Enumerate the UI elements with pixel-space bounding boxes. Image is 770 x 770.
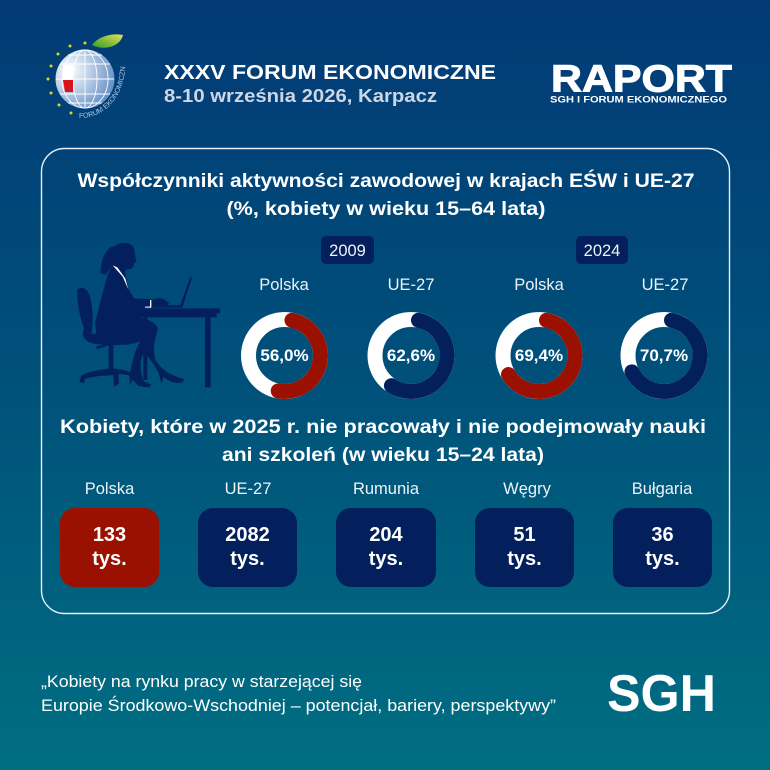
card: Polska 133 tys. xyxy=(60,508,159,587)
label: Rumunia: Rumunia xyxy=(353,480,420,498)
donut: Polska 2009: 56,0% xyxy=(260,346,309,365)
donut: UE-27 2024 xyxy=(621,313,707,398)
label: 2009 xyxy=(321,236,374,264)
heading: NEET women: Kobiety, które w 2025 r. nie pracowały i nie podejmowały nauki xyxy=(60,416,706,438)
icon: stars xyxy=(46,42,86,114)
label: UE-27: UE-27 xyxy=(225,480,271,498)
header: event date: 8-10 września 2026, Karpacz xyxy=(164,86,437,106)
donut: UE-27 2024: 70,7% xyxy=(640,346,688,365)
label: UE-27 2024: UE-27 xyxy=(642,276,688,294)
woman body xyxy=(95,243,185,387)
footer: report title xyxy=(41,673,556,715)
label: Polska: Polska xyxy=(85,480,135,498)
card: Polska 133 tys.: 133 xyxy=(93,524,126,546)
desk xyxy=(138,308,220,387)
blouse and cuff xyxy=(113,265,128,289)
laptop xyxy=(150,277,192,308)
header: event title: XXXV FORUM EKONOMICZNE xyxy=(164,62,496,84)
card: Bułgaria 36 tys.: 36 xyxy=(651,524,674,546)
label: Polska 2024: Polska xyxy=(514,276,565,294)
icon: leaf xyxy=(92,34,123,48)
heading: NEET women xyxy=(60,416,706,466)
card: UE-27 2082 tys.: tys. xyxy=(230,548,265,570)
card: UE-27 2082 tys. xyxy=(198,508,297,587)
donut: UE-27 2009 xyxy=(368,313,454,398)
icon: globe xyxy=(56,50,114,108)
heading: NEET women: ani szkoleń (w wieku 15–24 lata) xyxy=(222,444,544,466)
logo: SGH: SGH xyxy=(607,665,716,723)
card: UE-27 2082 tys.: 2082 xyxy=(225,524,270,546)
label: 2024: 2024 xyxy=(584,242,620,260)
panel: main content xyxy=(42,148,730,614)
label: 2024 xyxy=(576,236,628,264)
card: Bułgaria 36 tys.: tys. xyxy=(645,548,680,570)
logo: Forum Ekonomiczne xyxy=(46,34,126,118)
card: Rumunia 204 tys.: tys. xyxy=(369,548,403,570)
footer: report title: Europie Środkowo-Wschodniej – potencjał, bariery, perspektywy” xyxy=(41,696,556,715)
header: report subtitle: SGH I FORUM EKONOMICZNEGO xyxy=(550,94,727,106)
donut: UE-27 2009: 62,6% xyxy=(387,346,435,365)
heading: activity rates: Współczynniki aktywności zawodowej w krajach EŚW i UE-27 xyxy=(78,168,694,192)
label: Polska 2009: Polska xyxy=(259,276,310,294)
label: Bułgaria: Bułgaria xyxy=(632,480,693,498)
card: Rumunia 204 tys.: 204 xyxy=(369,524,404,546)
heading: activity rates: (%, kobiety w wieku 15–64 lata) xyxy=(226,198,546,220)
card: Węgry 51 tys. xyxy=(475,508,574,587)
heading: activity rates xyxy=(78,168,694,220)
chair xyxy=(77,288,135,387)
label: 2009: 2009 xyxy=(329,242,366,260)
donut: Polska 2024 xyxy=(496,313,582,398)
footer: report title: „Kobiety na rynku pracy w starzejącej się xyxy=(41,673,362,691)
card: Polska 133 tys.: tys. xyxy=(92,548,127,570)
header: report title: RAPORT xyxy=(551,58,732,100)
card: Bułgaria 36 tys. xyxy=(613,508,712,587)
card: Rumunia 204 tys. xyxy=(336,508,436,587)
donut: Polska 2009 xyxy=(242,313,327,398)
card: Węgry 51 tys.: 51 xyxy=(513,524,536,546)
icon: woman at desk xyxy=(77,243,220,387)
donut: Polska 2024: 69,4% xyxy=(515,346,563,365)
card: Węgry 51 tys.: tys. xyxy=(507,548,542,570)
label: Węgry: Węgry xyxy=(503,480,552,498)
label: UE-27 2009: UE-27 xyxy=(388,276,434,294)
